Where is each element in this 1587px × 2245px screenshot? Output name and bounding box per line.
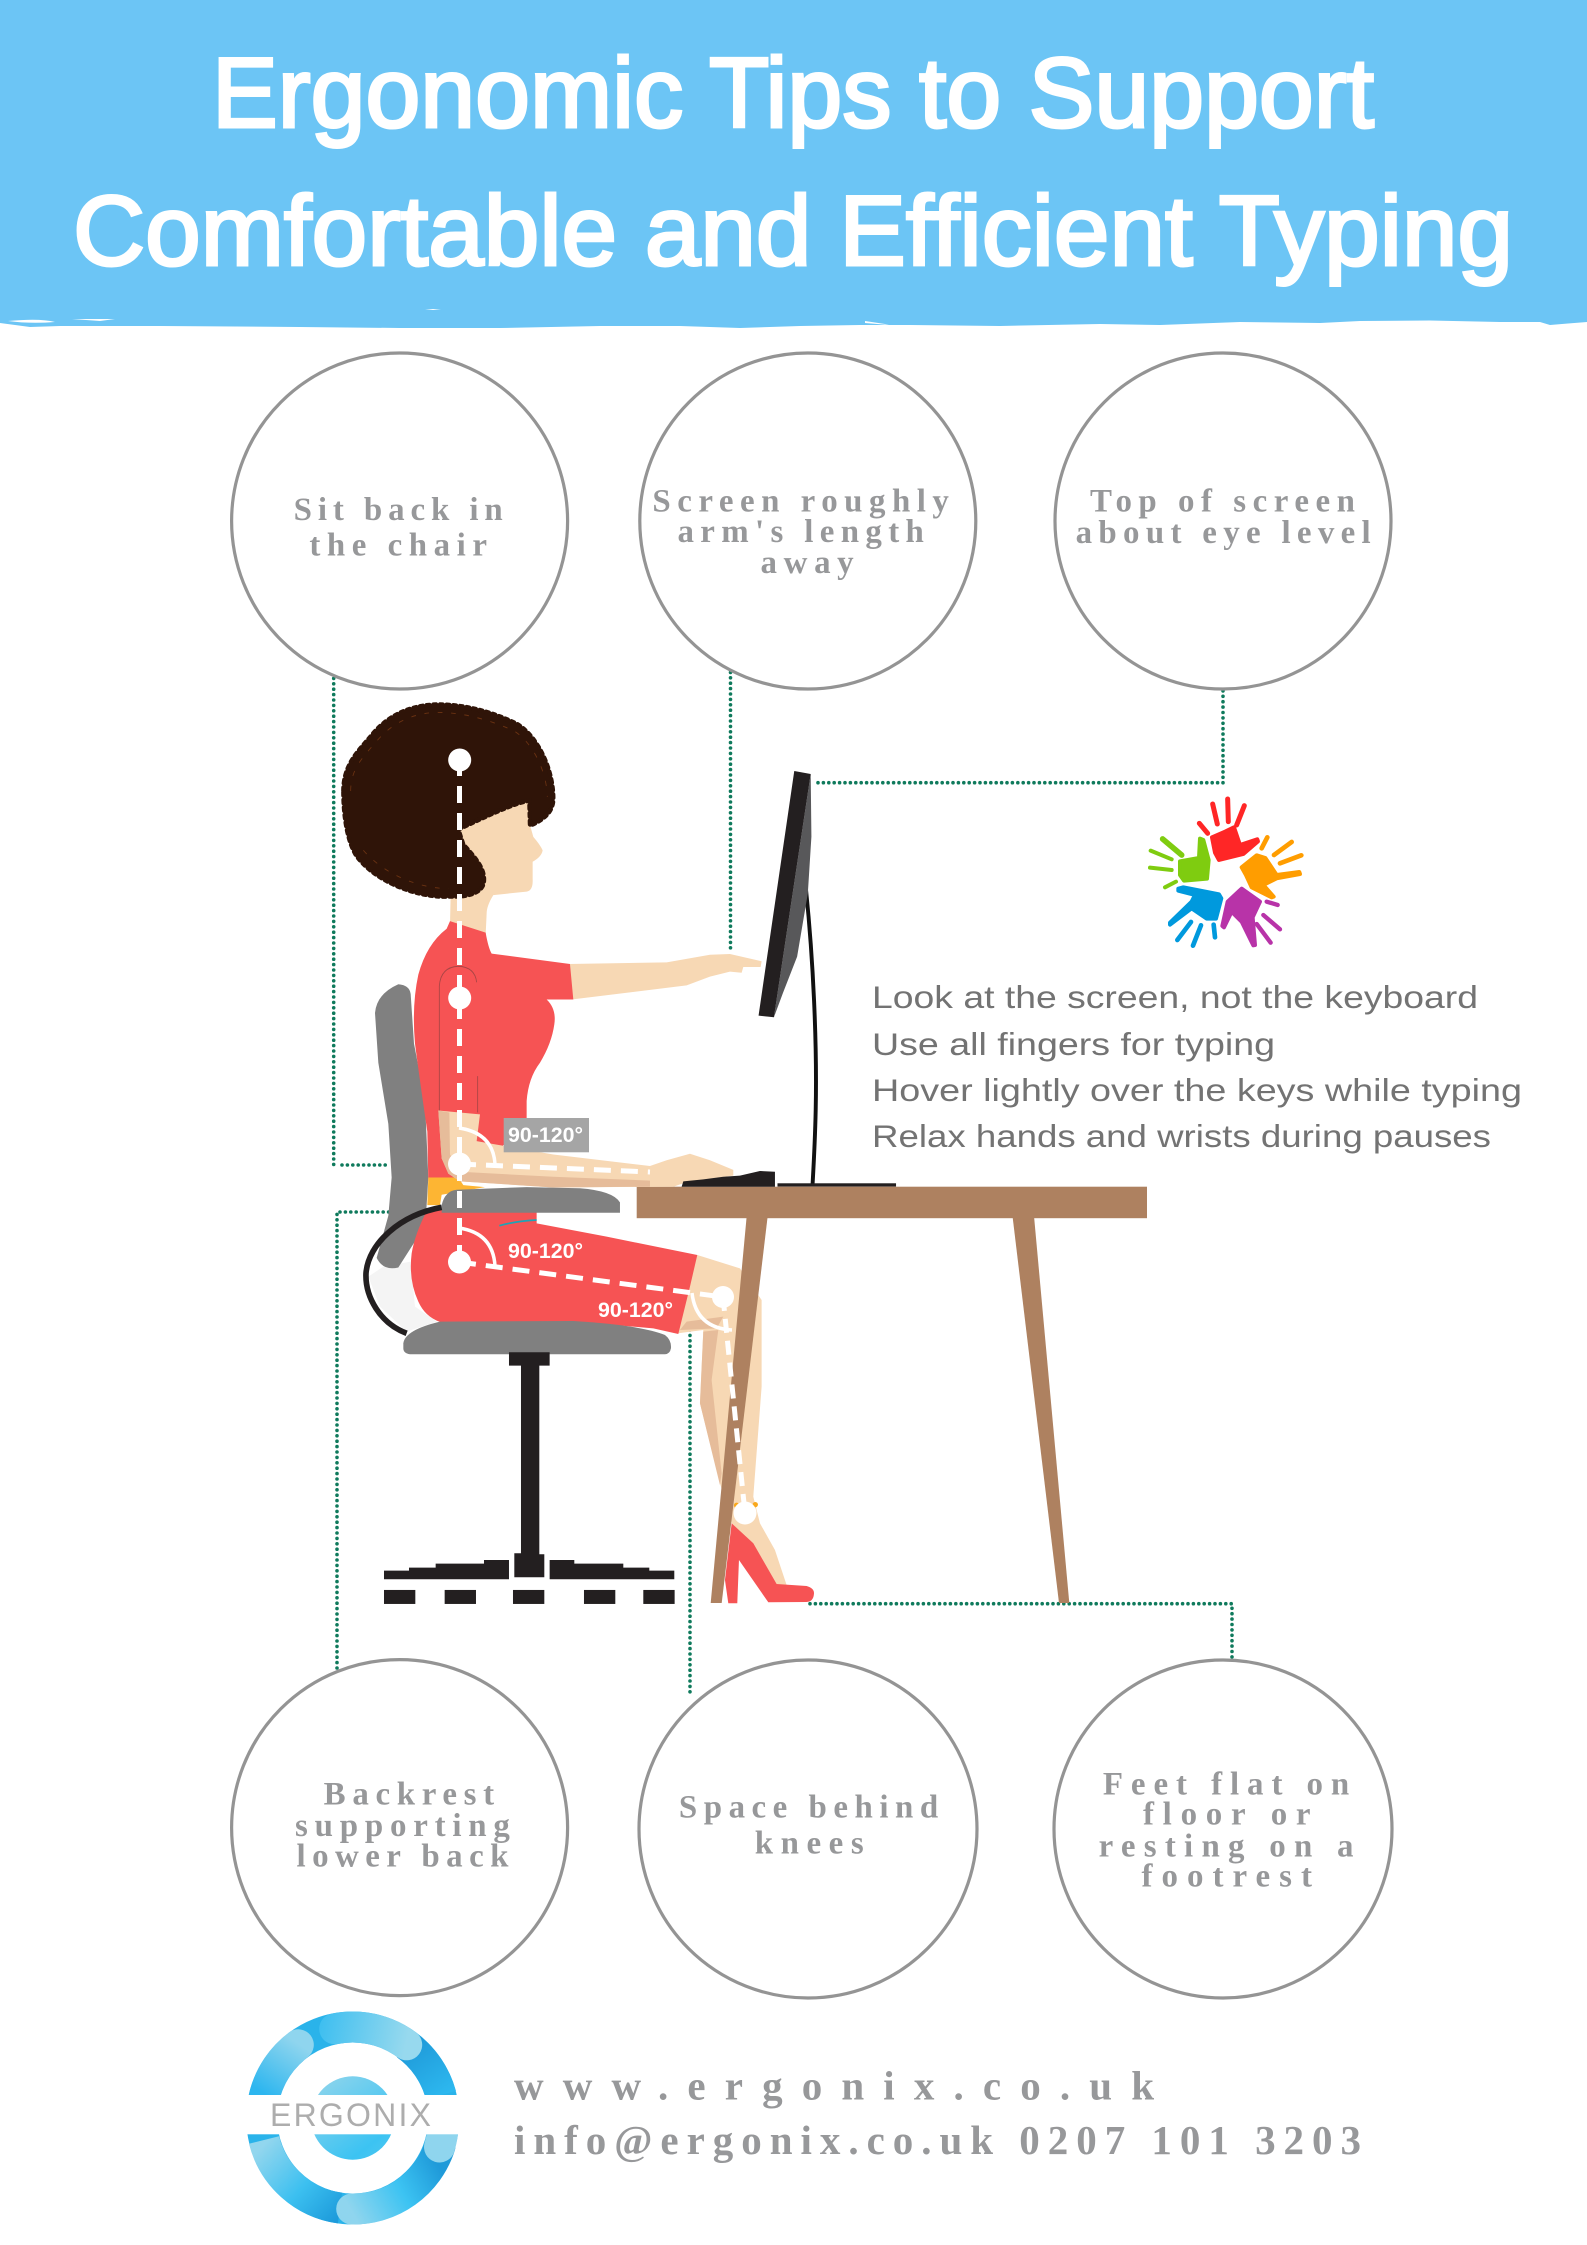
angle label: elbow: 90-120° <box>508 1124 583 1147</box>
dress top <box>414 921 573 1181</box>
illustration: desk and monitor <box>637 771 1147 1603</box>
icon: colourful hands <box>1150 799 1301 946</box>
extended arm <box>568 954 762 1000</box>
purple hand <box>1222 889 1280 945</box>
tip: Sit back in the chair: the chair <box>309 528 487 564</box>
chair back and backing wire <box>368 1262 437 1332</box>
tip: Screen roughly arm's length away: Screen roughly <box>652 484 949 520</box>
tip: Feet flat on floor or resting on a footrest: floor or <box>1143 1797 1311 1833</box>
tip: Space behind knees: knees <box>755 1825 864 1861</box>
text block: typing tips: Use all fingers for typing <box>872 1026 1275 1062</box>
monitor <box>759 771 896 1187</box>
legs <box>678 1255 814 1603</box>
tip: Screen roughly arm's length away <box>652 484 949 581</box>
posture guide lines and joints <box>448 748 756 1524</box>
text block: typing tips: Hover lightly over the keys while typing <box>872 1072 1522 1108</box>
tip: Feet flat on floor or resting on a footrest <box>1099 1767 1354 1894</box>
tip: Backrest supporting lower back <box>295 1777 510 1874</box>
contact: website: www.ergonix.co.uk <box>514 2062 1154 2108</box>
text block: typing tips <box>872 979 1522 1154</box>
tip: Top of screen about eye level: about eye level <box>1076 515 1371 551</box>
tip: Screen roughly arm's length away: arm's length <box>677 514 924 550</box>
armrest <box>442 1187 620 1213</box>
keyboard <box>682 1171 775 1187</box>
text block: typing tips: Relax hands and wrists during pauses <box>872 1118 1491 1154</box>
angle label: elbow <box>504 1118 589 1152</box>
waist belt <box>427 1178 485 1205</box>
blue hand <box>1170 887 1221 946</box>
tip: Feet flat on floor or resting on a footrest: footrest <box>1142 1858 1312 1894</box>
shoe <box>725 1523 814 1603</box>
tip: Sit back in the chair <box>294 492 503 564</box>
tip circles <box>232 353 1392 1998</box>
logo: Ergonix <box>240 2027 466 2209</box>
tip: Space behind knees: Space behind <box>679 1790 938 1826</box>
head, neck and hair <box>343 705 775 1213</box>
angle label: knee: 90-120° <box>598 1299 673 1322</box>
title: Comfortable and Efficient Typing <box>73 175 1513 286</box>
tip: Backrest supporting lower back: lower back <box>296 1838 509 1874</box>
dotted connector lines <box>334 667 1232 1697</box>
tip: Space behind knees <box>679 1790 938 1861</box>
tip: Backrest supporting lower back: Backrest <box>324 1777 494 1813</box>
title <box>73 37 1513 286</box>
header banner <box>0 0 1587 328</box>
desk <box>637 1187 1147 1603</box>
tip: Backrest supporting lower back: supporting <box>295 1808 510 1844</box>
illustration: seated woman on chair <box>343 705 814 1604</box>
green hand <box>1150 839 1209 887</box>
tip: Feet flat on floor or resting on a footrest: Feet flat on <box>1103 1767 1349 1803</box>
contact: email and phone: info@ergonix.co.uk 0207 101 3203 <box>514 2117 1361 2163</box>
tip: Top of screen about eye level: Top of screen <box>1090 483 1355 519</box>
red hand <box>1199 799 1258 860</box>
orange hand <box>1242 837 1301 897</box>
tip: Feet flat on floor or resting on a footrest: resting on a <box>1099 1828 1354 1864</box>
logo wordmark: ERGONIX <box>270 2097 431 2133</box>
text block: typing tips: Look at the screen, not the keyboard <box>872 979 1478 1015</box>
desk front leg <box>711 1216 768 1603</box>
title: Ergonomic Tips to Support <box>212 37 1374 148</box>
resting arm and hand <box>438 1111 733 1187</box>
chair seat, post and base <box>366 1207 675 1604</box>
tip: Sit back in the chair: Sit back in <box>294 492 503 528</box>
tip: Top of screen about eye level <box>1076 483 1371 551</box>
tip: Screen roughly arm's length away: away <box>761 545 854 581</box>
skirt <box>411 1210 697 1334</box>
angle label: hip: 90-120° <box>508 1240 583 1263</box>
